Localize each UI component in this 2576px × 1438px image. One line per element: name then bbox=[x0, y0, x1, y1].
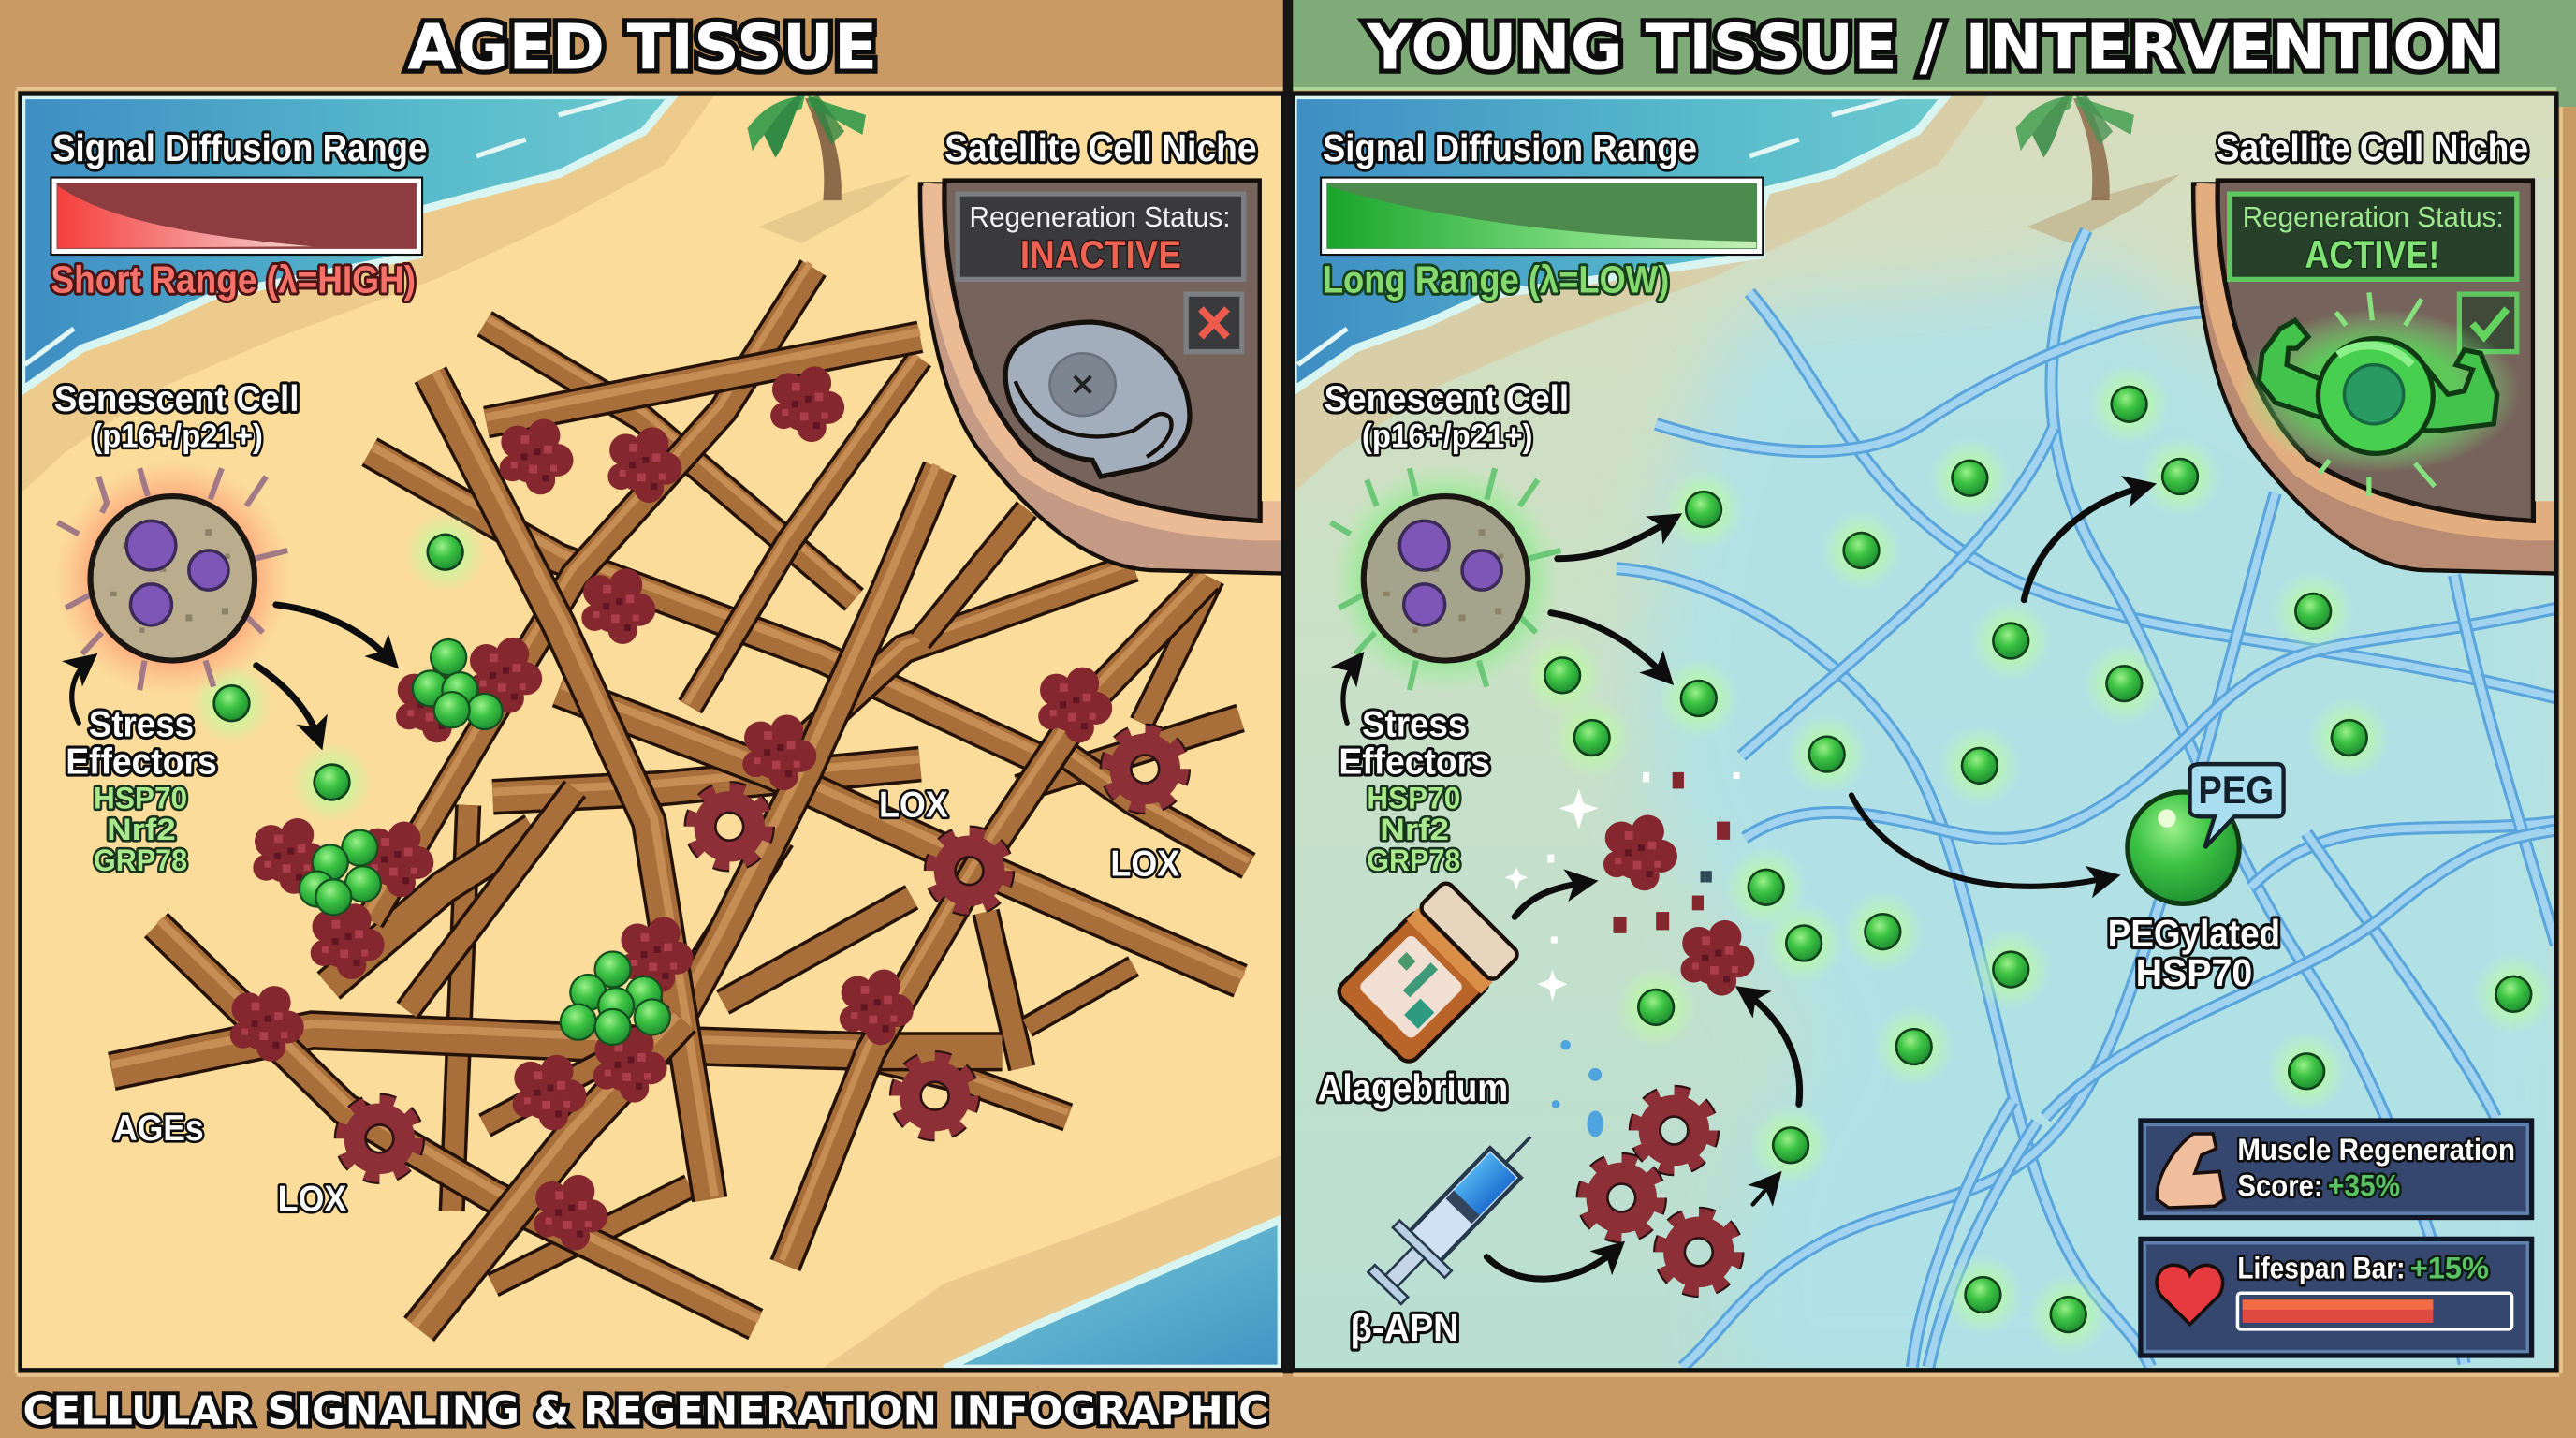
label: satellite cell niche: Satellite Cell Niche bbox=[944, 126, 1257, 169]
label: satellite cell niche: Satellite Cell Niche bbox=[2217, 126, 2528, 169]
LOX gears bbox=[341, 730, 1184, 1178]
AGE cross-link clusters bbox=[230, 366, 1112, 1251]
ocean bottom right bbox=[822, 1155, 1281, 1369]
footer title: CELLULAR SIGNALING & REGENERATION INFOGRAPHIC bbox=[23, 1388, 1268, 1435]
label: effector names: HSP70 bbox=[1367, 782, 1460, 815]
collagen rods: cross-linked mesh bbox=[111, 263, 1249, 1329]
free HSP70 particles, aged tissue bbox=[191, 511, 487, 823]
label: PEGylated HSP70: HSP70 bbox=[2136, 951, 2252, 994]
PEG tag bubble: PEG bbox=[2198, 768, 2274, 812]
gears, intervention bbox=[1583, 1092, 1737, 1291]
diffusing HSP70 particles bbox=[1521, 363, 2554, 1356]
sand background bbox=[22, 95, 1281, 1369]
left panel text labels bbox=[51, 11, 1257, 1220]
label: p16 p21: (p16+/p21+) bbox=[92, 418, 263, 454]
label: stress effectors bbox=[1339, 704, 1490, 783]
label: effector names bbox=[1367, 782, 1460, 877]
label: PEGylated HSP70 bbox=[2108, 912, 2280, 994]
label: stress effectors bbox=[66, 704, 217, 783]
ocean top left bbox=[22, 95, 714, 493]
right header background bbox=[1293, 0, 2576, 107]
label: stress effectors: Stress bbox=[89, 704, 194, 744]
status box: Regeneration Status: bbox=[2243, 200, 2504, 233]
score text: Score: bbox=[2237, 1169, 2323, 1203]
label: beta-APN: β-APN bbox=[1351, 1306, 1459, 1349]
score text: +35% bbox=[2328, 1169, 2400, 1203]
label: stress effectors: Effectors bbox=[66, 742, 217, 783]
status box bbox=[958, 194, 1244, 279]
icon: check mark bbox=[2459, 294, 2517, 352]
panel: muscle regeneration score bbox=[2141, 1121, 2532, 1218]
label: effector names: Nrf2 bbox=[107, 813, 176, 846]
palm tree bbox=[2016, 95, 2180, 243]
senescent cell, aged tissue bbox=[54, 460, 291, 697]
icon: alagebrium pill bottle bbox=[1335, 880, 1520, 1066]
right panel text labels bbox=[1318, 11, 2528, 1349]
status box: INACTIVE bbox=[1020, 232, 1181, 276]
lifespan meter bbox=[2237, 1293, 2512, 1329]
icon: beta-APN syringe bbox=[1358, 1111, 1557, 1313]
satellite cell niche, inactive bbox=[920, 178, 1283, 574]
lifespan text: Lifespan Bar: bbox=[2237, 1251, 2405, 1284]
satellite cell niche, active bbox=[2193, 178, 2556, 574]
label: senescent cell: Senescent Cell bbox=[1325, 379, 1569, 419]
status box bbox=[2230, 194, 2517, 279]
ocean top left bbox=[1293, 95, 1988, 493]
translucent blue diffusion field bbox=[1647, 246, 2576, 1397]
label: AGEs: AGEs bbox=[113, 1108, 204, 1149]
label: PEGylated HSP70: PEGylated bbox=[2108, 912, 2280, 955]
title: young tissue: YOUNG TISSUE / INTERVENTION bbox=[1366, 11, 2500, 84]
label: effector names bbox=[94, 782, 187, 877]
diffusion bar: long range bbox=[1321, 178, 1763, 255]
label: effector names: GRP78 bbox=[1367, 844, 1460, 877]
icon: dormant satellite cell bbox=[1005, 322, 1190, 477]
label: LOX: LOX bbox=[278, 1180, 347, 1220]
label: LOX: LOX bbox=[1110, 844, 1179, 884]
label: p16 p21: (p16+/p21+) bbox=[1362, 418, 1533, 454]
label: long range: Long Range (λ=LOW) bbox=[1323, 257, 1669, 301]
label: alagebrium: Alagebrium bbox=[1318, 1066, 1508, 1109]
trapped HSP70 clusters bbox=[299, 638, 671, 1046]
arrows, intervention bbox=[1343, 487, 2145, 1279]
panel: lifespan bar bbox=[2141, 1239, 2532, 1356]
icon: X mark bbox=[1186, 294, 1242, 352]
right panel: young tissue scene bbox=[1293, 95, 2576, 1397]
palm tree bbox=[748, 95, 912, 243]
PEG tag bubble bbox=[2190, 764, 2284, 848]
status box: Regeneration Status: bbox=[970, 200, 1231, 233]
label: senescent cell: Senescent Cell bbox=[54, 379, 299, 419]
lifespan text: +15% bbox=[2410, 1251, 2489, 1284]
PEGylated HSP70 sphere bbox=[2128, 764, 2284, 903]
label: LOX: LOX bbox=[879, 785, 948, 825]
label: stress effectors: Effectors bbox=[1339, 742, 1490, 783]
label: signal diffusion range: Signal Diffusion Range bbox=[1323, 126, 1697, 169]
elastic blue fibers bbox=[1617, 230, 2558, 1367]
label: effector names: GRP78 bbox=[94, 844, 187, 877]
label: effector names: Nrf2 bbox=[1380, 813, 1449, 846]
label: effector names: HSP70 bbox=[94, 782, 187, 815]
icon: flexed arm bbox=[2157, 1134, 2224, 1208]
tinted sand background bbox=[1293, 95, 2558, 1369]
center divider bbox=[1283, 0, 1293, 1373]
label: short range: Short Range (λ=HIGH) bbox=[51, 257, 416, 301]
icon: activated muscle satellite cell bbox=[2237, 292, 2520, 496]
title: aged tissue: AGED TISSUE bbox=[407, 11, 877, 84]
score text: Muscle Regeneration bbox=[2237, 1133, 2515, 1167]
score text bbox=[2237, 1133, 2515, 1203]
arrows, aged tissue bbox=[72, 605, 391, 740]
breaking AGE debris and sparkles bbox=[1505, 772, 1754, 1003]
senescent cell, intervention bbox=[1331, 463, 1560, 694]
diffusion bar: short range bbox=[51, 178, 422, 255]
icon: heart bbox=[2157, 1265, 2223, 1325]
blue drops from syringe bbox=[1552, 1040, 1603, 1137]
label: stress effectors: Stress bbox=[1362, 704, 1467, 744]
left panel: aged tissue scene bbox=[22, 95, 1281, 1369]
label: signal diffusion range: Signal Diffusion Range bbox=[52, 126, 427, 169]
status box: ACTIVE! bbox=[2305, 232, 2439, 276]
